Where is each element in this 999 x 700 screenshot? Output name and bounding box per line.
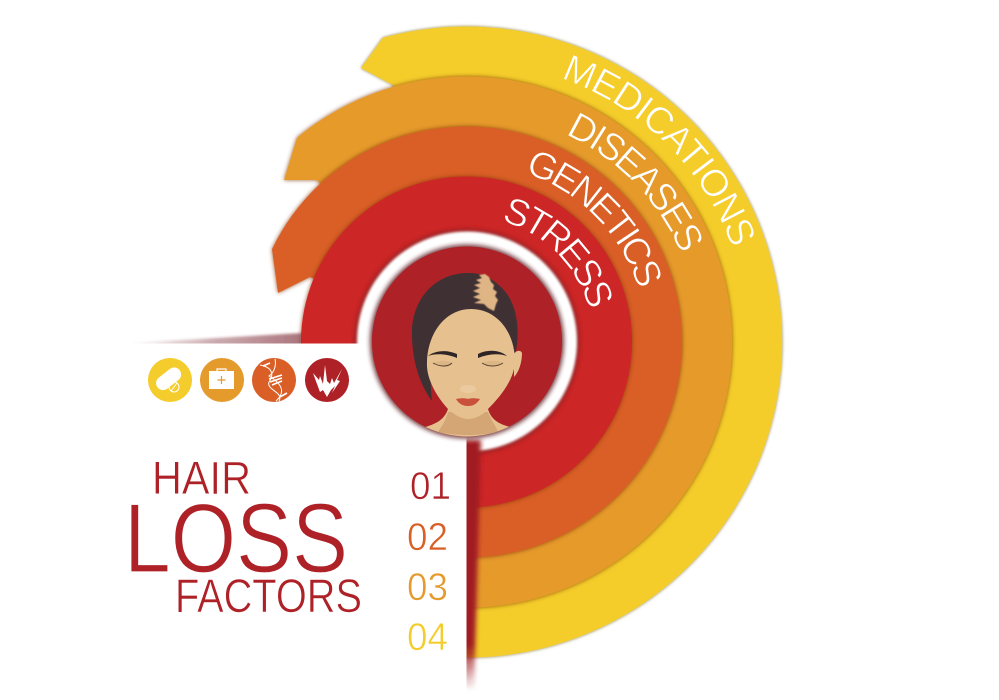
ring: medications (yellow)	[361, 27, 782, 658]
ear	[514, 351, 522, 377]
title line: factors: FACTORS	[175, 569, 362, 622]
panel: white title card	[130, 344, 466, 700]
label: stress: STRESS	[505, 198, 612, 306]
icon: DNA helix	[252, 358, 296, 402]
ring: genetics (orange)	[272, 127, 682, 558]
panel shadow	[130, 333, 481, 690]
thinning patch	[473, 274, 498, 311]
lips	[456, 398, 480, 406]
woman's face	[412, 273, 522, 445]
icon: first aid case	[200, 358, 244, 402]
disc shadow	[370, 244, 564, 438]
hair	[412, 273, 518, 401]
number 04: 04	[407, 616, 448, 659]
number 03: 03	[407, 566, 448, 609]
label: medications: MEDICATIONS	[564, 55, 754, 244]
portrait medallion	[370, 244, 564, 445]
eyes closed	[434, 361, 451, 366]
number 01: 01	[410, 465, 451, 508]
white ring around portrait	[354, 229, 580, 454]
numbers list	[407, 465, 451, 659]
eyebrows	[428, 351, 457, 358]
label: diseases: DISEASES	[568, 113, 702, 250]
label: genetics: GENETICS	[530, 152, 660, 286]
icon: pill	[148, 358, 192, 402]
title line: hair: HAIR	[152, 452, 251, 504]
icon: stress bolts	[305, 358, 349, 402]
title line: loss: LOSS	[124, 483, 348, 593]
title	[124, 452, 362, 622]
number 02: 02	[407, 516, 448, 559]
nose	[460, 385, 476, 393]
face	[427, 309, 515, 419]
ring: diseases (amber)	[284, 77, 732, 608]
ring: stress (red)	[301, 176, 632, 508]
neck and shoulders	[426, 409, 509, 436]
maroon disc	[372, 246, 562, 436]
